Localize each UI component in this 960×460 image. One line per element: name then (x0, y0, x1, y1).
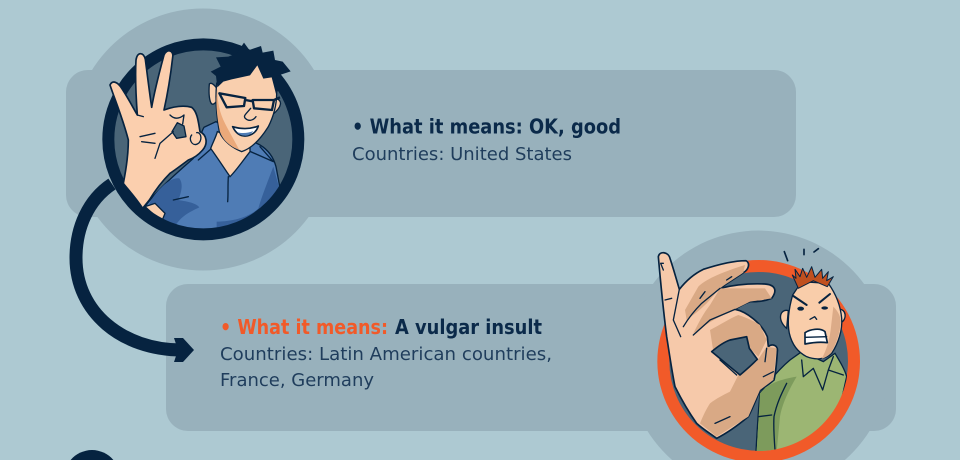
hand creases (661, 263, 773, 423)
portrait disc (108, 44, 298, 234)
anger marks (784, 249, 818, 261)
portrait ring (657, 260, 860, 460)
hair (792, 267, 833, 288)
angry eyes and brows (793, 294, 830, 305)
text block: countries: Countries: United States (352, 144, 572, 165)
hand hole (172, 123, 186, 138)
glasses (219, 93, 280, 110)
panel shape (166, 284, 896, 431)
hand creases (137, 115, 201, 158)
hair (211, 43, 291, 94)
text block: meaning label: • What it means: (220, 315, 388, 339)
text block: meaning: • What it means: OK, good (352, 114, 621, 138)
nose and mouth (244, 108, 256, 120)
hand (658, 253, 777, 438)
mouth (805, 329, 827, 344)
portrait halo (628, 231, 889, 460)
panel shape (66, 70, 796, 217)
shirt (145, 122, 282, 237)
head (788, 282, 842, 359)
icon: next item circle (71, 450, 113, 460)
panel: OK, good (66, 8, 796, 270)
shirt (756, 352, 847, 452)
portrait halo (72, 8, 334, 270)
ears (780, 309, 845, 328)
text block: countries line 1: Countries: Latin American countries, (220, 344, 552, 365)
text block: countries line 2: France, Germany (220, 370, 374, 391)
hand (110, 51, 206, 208)
portrait disc (668, 271, 849, 452)
arrow: connecting first portrait to second panel (76, 184, 194, 362)
face shadow (216, 88, 239, 150)
text block: meaning value: A vulgar insult (395, 315, 542, 339)
neck (211, 132, 250, 177)
face shadow (822, 307, 841, 359)
head (216, 63, 277, 152)
illustration: man making OK gesture (108, 43, 298, 237)
illustration: angry man and vulgar gesture (657, 249, 860, 460)
hand shading (685, 265, 777, 437)
ears (209, 83, 280, 115)
hand hole (712, 337, 757, 375)
nose (810, 317, 817, 319)
portrait ring (108, 44, 298, 234)
panel: vulgar insult (166, 231, 896, 460)
